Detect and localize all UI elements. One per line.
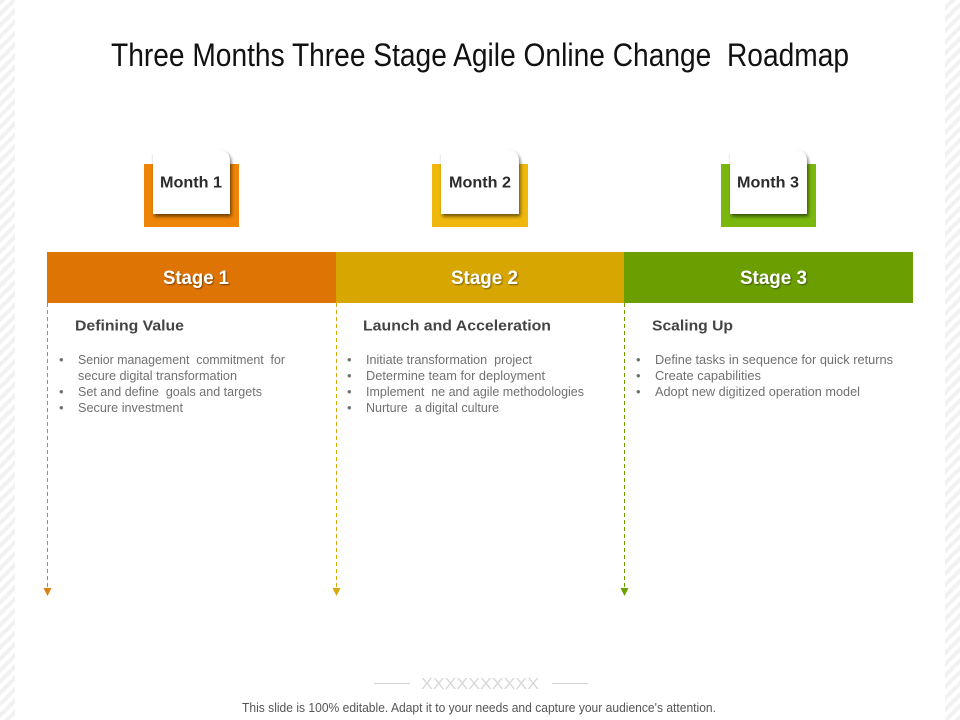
- arrow: stage 2 dashed: [332, 303, 340, 596]
- text block: stage 1 bullets: Senior management commitment for: [78, 352, 286, 367]
- text block: stage 1 bullets: [59, 352, 286, 415]
- panel: stage 1 header: Stage 1: [163, 268, 229, 289]
- icon: month 1 card: [144, 144, 239, 227]
- heading: launch and acceleration: Launch and Acceleration: [363, 318, 551, 334]
- panel: stage 1 header: [47, 252, 336, 303]
- text block: stage 3 bullets: [636, 352, 893, 399]
- icon: month 2 card: Month 2: [449, 174, 511, 192]
- text block: stage 2 bullets: Determine team for deployment: [366, 368, 545, 383]
- arrow: stage 3 dashed: [620, 303, 628, 596]
- panel: stage 2 header: [336, 252, 624, 303]
- text block: stage 1 bullets: Set and define goals and targets: [78, 384, 262, 399]
- panel: stage 2 header: Stage 2: [451, 268, 518, 289]
- text block: stage 2 bullets: Implement ne and agile methodologies: [366, 384, 584, 399]
- text block: stage 2 bullets: Nurture a digital culture: [366, 400, 499, 415]
- heading: defining value: Defining Value: [75, 318, 184, 334]
- footer placeholder ornament: XXXXXXXXXX: [421, 676, 539, 693]
- title: Three Months Three Stage Agile Online Change Roadmap: [111, 37, 849, 73]
- icon: month 2 card: [432, 144, 528, 227]
- text block: stage 2 bullets: •: [347, 400, 352, 415]
- icon: month 3 card: [721, 144, 816, 227]
- text block: stage 3 bullets: •: [636, 352, 641, 367]
- text block: stage 3 bullets: Create capabilities: [655, 368, 761, 383]
- text block: stage 3 bullets: •: [636, 368, 641, 383]
- text block: stage 2 bullets: •: [347, 368, 352, 383]
- panel: stage 3 header: Stage 3: [740, 268, 807, 289]
- text block: stage 2 bullets: •: [347, 384, 352, 399]
- text block: stage 2 bullets: Initiate transformation project: [366, 352, 532, 367]
- text block: stage 1 bullets: •: [59, 352, 64, 367]
- text block: stage 3 bullets: •: [636, 384, 641, 399]
- arrow: stage 1 dashed: [44, 303, 52, 596]
- text block: stage 1 bullets: Secure investment: [78, 400, 183, 415]
- text block: stage 1 bullets: •: [59, 384, 64, 399]
- icon: month 3 card: Month 3: [737, 174, 799, 192]
- text block: stage 3 bullets: Define tasks in sequence for quick returns: [655, 352, 893, 367]
- text block: stage 2 bullets: •: [347, 352, 352, 367]
- heading: scaling up: Scaling Up: [652, 318, 733, 334]
- panel: stage 3 header: [624, 252, 913, 303]
- text block: stage 3 bullets: Adopt new digitized operation model: [655, 384, 860, 399]
- icon: month 1 card: Month 1: [160, 174, 222, 192]
- footer note: This slide is 100% editable. Adapt it to your needs and capture your audience's attention.: [242, 701, 716, 715]
- text block: stage 1 bullets: secure digital transformation: [78, 368, 237, 383]
- text block: stage 2 bullets: [347, 352, 584, 415]
- text block: stage 1 bullets: •: [59, 400, 64, 415]
